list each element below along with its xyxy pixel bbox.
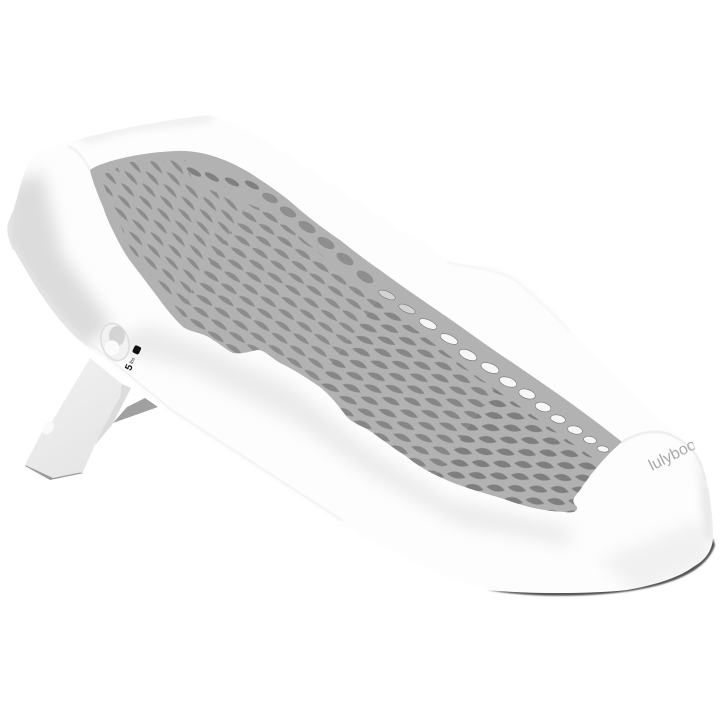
release knob: [96, 320, 134, 364]
folding leg: [25, 358, 131, 480]
safety icon label: lbs: [129, 356, 137, 365]
brand logo text: lulyboo: [646, 436, 699, 475]
mesh holes: [104, 160, 610, 512]
lower lip line: [13, 250, 487, 590]
end crest crease: [68, 146, 90, 170]
headrest crest line: [622, 432, 705, 480]
safety icon label: 5: [123, 362, 136, 373]
top row of holes: [187, 167, 260, 190]
product illustration: baby bath seat: [7, 115, 716, 597]
grey mesh panel: [90, 150, 622, 512]
safety icon label: [123, 344, 144, 373]
shell shading: [2, 112, 716, 595]
seat shell: [2, 112, 716, 595]
grey rear brace: [113, 398, 158, 423]
base shadow under the seat: [487, 538, 715, 596]
